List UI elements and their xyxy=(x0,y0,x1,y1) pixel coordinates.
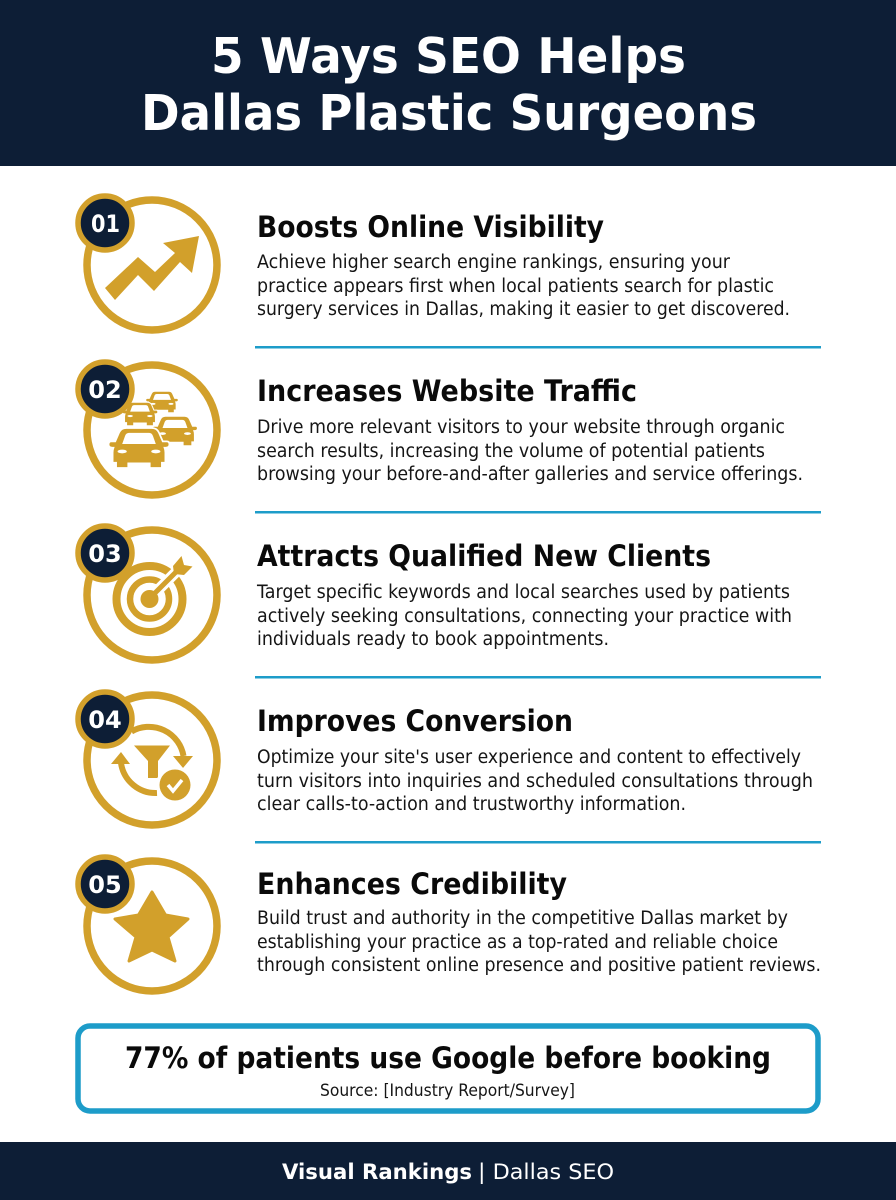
text: item 03 description: actively seeking consultations, connecting your practice with xyxy=(257,606,792,627)
text: item 01 description: Achieve higher search engine rankings, ensuring your xyxy=(257,252,730,273)
footer brand text: | Dallas SEO xyxy=(478,1160,614,1185)
text: item 03 description: individuals ready to book appointments. xyxy=(257,629,609,650)
badge 05 xyxy=(78,857,132,911)
panel: item 05 enhances credibility xyxy=(78,857,821,991)
panel: item 04 improves conversion xyxy=(78,692,813,825)
text: item 05 description: Build trust and authority in the competitive Dallas market by xyxy=(257,908,788,929)
heading: increases website traffic: Increases Website Traffic xyxy=(257,374,637,408)
panel: item 03 attracts qualified new clients xyxy=(78,526,792,660)
footer brand text: Visual Rankings xyxy=(282,1160,472,1184)
badge 04: 04 xyxy=(88,706,122,734)
title xyxy=(141,28,757,142)
text: item 04 description xyxy=(257,747,813,815)
text: item 04 description: clear calls-to-action and trustworthy information. xyxy=(257,794,686,815)
source note: Source: [Industry Report/Survey] xyxy=(320,1081,575,1101)
text: item 01 description: surgery services in Dallas, making it easier to get discovered. xyxy=(257,299,790,320)
badge 04 xyxy=(78,692,132,746)
icon: star in circle xyxy=(87,861,217,991)
footer banner xyxy=(0,1142,896,1200)
panel: item 02 increases website traffic xyxy=(78,362,803,495)
text: item 03 description: Target specific keywords and local searches used by patients xyxy=(256,582,790,603)
title: Dallas Plastic Surgeons xyxy=(141,85,757,142)
heading: boosts online visibility: Boosts Online Visibility xyxy=(257,210,604,244)
text: item 02 description xyxy=(257,417,803,485)
panel: item 01 boosts online visibility xyxy=(78,196,790,330)
text: item 03 description xyxy=(256,582,792,650)
footer brand text xyxy=(282,1160,614,1185)
heading: improves conversion: Improves Conversion xyxy=(257,704,573,738)
heading: enhances credibility: Enhances Credibility xyxy=(257,867,567,901)
heading: attracts qualified new clients: Attracts Qualified New Clients xyxy=(257,539,711,573)
text: item 01 description xyxy=(257,252,790,320)
text: item 05 description xyxy=(257,908,821,976)
text: item 05 description: establishing your practice as a top-rated and reliable choice xyxy=(257,932,778,953)
badge 02: 02 xyxy=(88,376,122,404)
callout: statistic xyxy=(78,1026,818,1111)
badge 01 xyxy=(78,196,132,250)
icon: funnel with cycle arrows and check in circle xyxy=(87,695,217,825)
badge 02 xyxy=(78,362,132,416)
badge 01: 01 xyxy=(91,210,120,238)
badge 03: 03 xyxy=(88,540,122,568)
icon: rising arrow in circle xyxy=(87,200,217,330)
icon: target with arrow in circle xyxy=(87,530,217,660)
badge 03 xyxy=(78,526,132,580)
text: item 02 description: browsing your before-and-after galleries and service offerings. xyxy=(257,464,803,485)
text: item 04 description: turn visitors into inquiries and scheduled consultations through xyxy=(257,771,813,792)
text: item 01 description: practice appears first when local patients search for plastic xyxy=(257,276,774,297)
text: item 02 description: Drive more relevant visitors to your website through organic xyxy=(257,417,785,438)
text: item 04 description: Optimize your site's user experience and content to effectively xyxy=(257,747,801,768)
icon: cars in traffic in circle xyxy=(87,365,217,495)
text: item 05 description: through consistent online presence and positive patient reviews. xyxy=(257,955,821,976)
badge 05: 05 xyxy=(88,871,122,899)
statistic headline: 77% of patients use Google before booking xyxy=(125,1041,771,1075)
header banner xyxy=(0,0,896,166)
text: item 02 description: search results, increasing the volume of potential patients xyxy=(257,441,765,462)
title: 5 Ways SEO Helps xyxy=(211,28,686,85)
